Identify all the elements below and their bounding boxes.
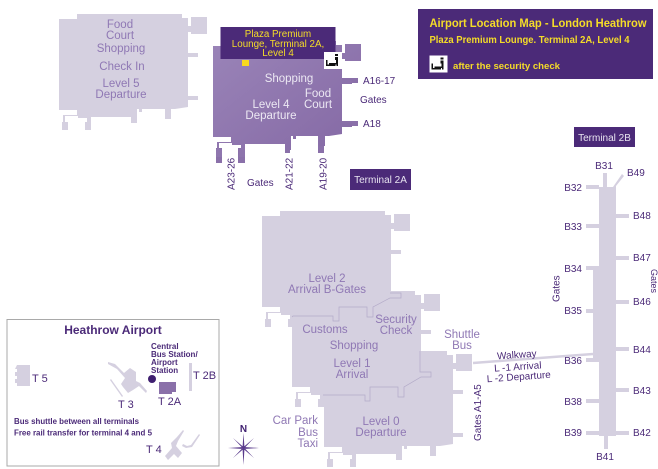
compass xyxy=(228,424,259,465)
label: Gates A1-A5: Gates A1-A5 xyxy=(473,384,484,441)
labels: Level 5: Check In xyxy=(99,61,145,73)
station label: Station xyxy=(151,366,178,375)
station dot xyxy=(148,375,156,383)
labels: B gates: B48 xyxy=(633,211,651,222)
labels: B gates: B33 xyxy=(564,222,582,233)
building: Level 1 Arrival xyxy=(292,291,440,407)
labels: A gates xyxy=(226,76,396,190)
T5 shape xyxy=(15,365,30,386)
labels: Level 5: Court xyxy=(106,30,135,42)
labels: terminal 2A lower levels: Arrival B-Gates xyxy=(288,284,366,296)
labels: terminal 2A lower levels: Arrival xyxy=(336,369,368,381)
icon: lounge seat xyxy=(324,52,342,69)
labels: A gates: A18 xyxy=(363,119,381,130)
labels: A gates: Gates xyxy=(360,95,387,106)
labels: Level 4 xyxy=(245,73,333,122)
labels: B gates: B43 xyxy=(633,386,651,397)
labels: terminal 2A lower levels: Car Park xyxy=(273,415,318,427)
terminal labels: T 3 xyxy=(118,399,134,411)
labels: Level 4: Food xyxy=(305,88,331,100)
labels: terminal 2A lower levels: Shuttle xyxy=(444,329,480,341)
labels: terminal 2A lower levels: Level 2 xyxy=(308,273,346,285)
building: Level 5 Departure xyxy=(59,14,207,130)
T3 shape xyxy=(108,362,147,397)
labels: terminal 2A lower levels: Shopping xyxy=(330,340,378,352)
terminal labels: T 5 xyxy=(32,373,48,385)
T2B bar xyxy=(189,363,192,391)
labels: terminal 2A lower levels: Taxi xyxy=(298,438,318,450)
labels: A gates: A23-26 xyxy=(226,157,238,190)
heading: Airport Location Map - London Heathrow xyxy=(430,18,647,30)
labels: B gates: B47 xyxy=(633,253,651,264)
callout: Plaza Premium Lounge banner: Lounge, Terminal 2A, xyxy=(232,39,324,50)
labels: terminal 2A lower levels: Departure xyxy=(355,427,407,439)
labels: Level 4: Departure xyxy=(245,110,297,122)
walkway xyxy=(473,349,593,385)
terminal labels: T 2A xyxy=(158,396,182,408)
note: after the security check xyxy=(453,61,561,71)
building: Level 0 Departure xyxy=(324,351,472,467)
labels: terminal 2A lower levels: Level 1 xyxy=(333,358,371,370)
labels: B gates: B44 xyxy=(633,345,651,356)
walkway: L -2 Departure xyxy=(486,370,552,385)
labels: B gates: B42 xyxy=(633,428,651,439)
notes xyxy=(14,417,153,438)
labels: Level 5: Departure xyxy=(95,89,147,101)
label box: Terminal 2A: Terminal 2A xyxy=(354,175,407,186)
heading: Heathrow Airport xyxy=(64,323,162,337)
labels: B gates: B34 xyxy=(564,264,582,275)
labels: terminal 2A lower levels: Bus xyxy=(298,427,318,439)
labels: B gates: B32 xyxy=(564,183,582,194)
labels: B gates: B41 xyxy=(596,452,614,463)
labels: B gates: B35 xyxy=(564,306,582,317)
labels: Level 4: Level 4 xyxy=(252,99,290,111)
labels: B gates: B39 xyxy=(564,428,582,439)
labels: B gates: B49 xyxy=(627,168,645,179)
notes: Free rail transfer for terminal 4 and 5 xyxy=(14,428,153,438)
callout: Plaza Premium Lounge banner xyxy=(220,27,336,59)
panel: Heathrow Airport inset map xyxy=(7,320,219,466)
walkway: Walkway xyxy=(497,349,537,362)
building: Level 2 Arrival xyxy=(262,211,410,327)
panel: title xyxy=(418,9,653,79)
walkway: L -1 Arrival xyxy=(494,360,542,375)
labels: terminal 2A lower levels xyxy=(273,273,480,450)
labels: Level 5: Level 5 xyxy=(102,78,140,90)
label box: Terminal 2B: Terminal 2B xyxy=(578,133,631,144)
labels: B gates: B46 xyxy=(633,297,651,308)
labels: Level 4: Shopping xyxy=(265,73,313,85)
label box: Terminal 2B xyxy=(574,127,635,147)
notes: Bus shuttle between all terminals xyxy=(14,417,140,426)
labels: A gates: Gates xyxy=(247,178,274,189)
labels: terminal 2A lower levels: Bus xyxy=(452,340,472,352)
labels: B gates xyxy=(552,161,658,463)
labels: terminal 2A lower levels: Level 0 xyxy=(362,416,400,428)
terminal labels xyxy=(32,370,216,456)
callout: Plaza Premium Lounge banner: Plaza Premium xyxy=(245,29,311,40)
T4 shape xyxy=(165,430,200,460)
icon: lounge seat xyxy=(430,56,448,72)
station label xyxy=(151,342,198,375)
callout: Plaza Premium Lounge banner: Level 4 xyxy=(262,48,294,59)
labels: B gates: B36 xyxy=(564,356,582,367)
terminal labels: T 4 xyxy=(146,444,162,456)
station label: Central xyxy=(151,342,179,351)
subheading: Plaza Premium Lounge. Terminal 2A, Level 4 xyxy=(430,35,630,46)
station label: Bus Station/ xyxy=(151,350,198,359)
labels: Level 5 xyxy=(95,19,147,101)
compass: N xyxy=(240,424,247,435)
T2A shape xyxy=(159,382,176,394)
labels: A gates: A19-20 xyxy=(318,157,330,190)
labels: A gates: A21-22 xyxy=(284,157,296,190)
building: Level 4 Departure xyxy=(213,41,361,163)
labels: terminal 2A lower levels: Security xyxy=(375,314,417,326)
building: Terminal 2B concourse xyxy=(586,173,629,449)
labels: Level 5: Shopping xyxy=(97,43,145,55)
labels: B gates: B31 xyxy=(595,161,613,172)
labels: Level 4: Court xyxy=(304,99,333,111)
terminal labels: T 2B xyxy=(193,370,216,382)
labels: B gates: Gates xyxy=(552,275,562,302)
labels: A gates: A16-17 xyxy=(363,76,396,87)
marker: yellow location square xyxy=(242,60,249,66)
labels: Level 5: Food xyxy=(107,19,133,31)
station label: Airport xyxy=(151,358,178,367)
labels: terminal 2A lower levels: Customs xyxy=(302,324,348,336)
label box: Terminal 2A xyxy=(350,169,411,190)
labels: B gates: B38 xyxy=(564,397,582,408)
labels: terminal 2A lower levels: Check xyxy=(380,325,413,337)
